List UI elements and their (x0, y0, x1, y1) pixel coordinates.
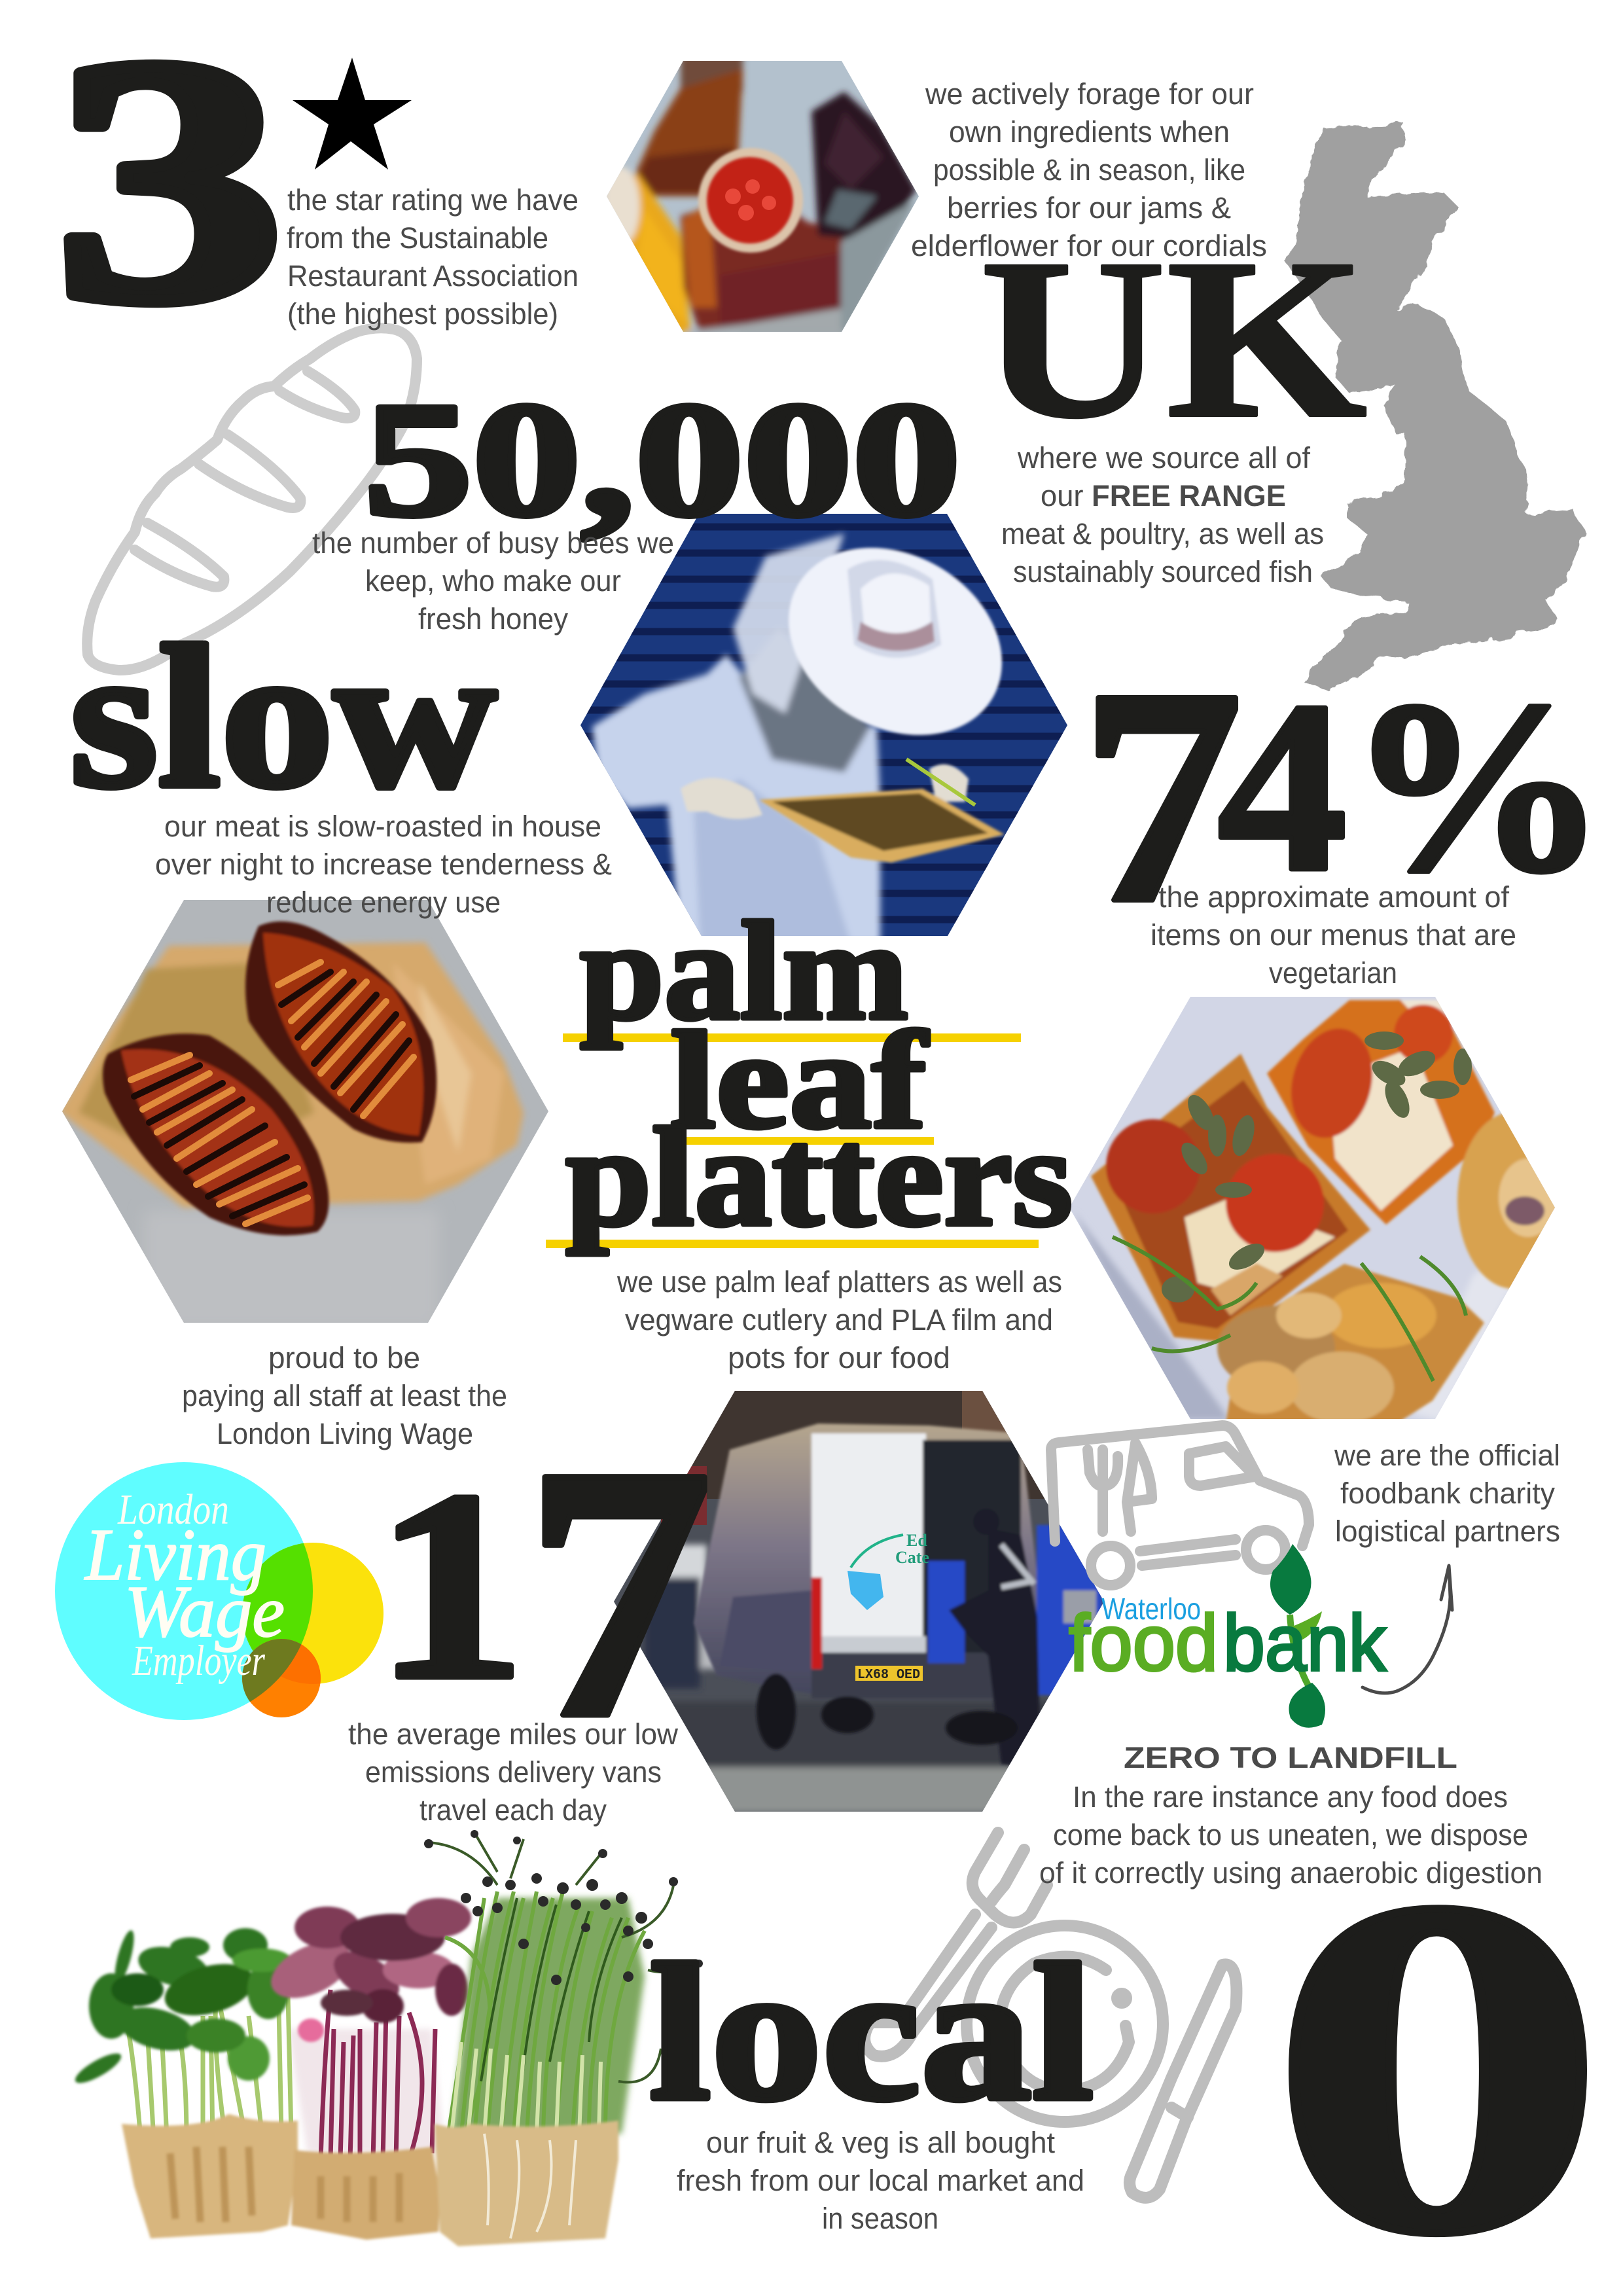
text: local produce: our fruit & veg is all bought (706, 2126, 1055, 2159)
photo hexagon: delivery van being loaded: Cate (895, 1548, 929, 1567)
icon: baguette outline (87, 328, 417, 670)
text: delivery miles: the average miles our low (348, 1717, 678, 1751)
text: foraging: own ingredients when (949, 115, 1230, 149)
text: vegetarian share: the approximate amount of (1158, 880, 1509, 914)
yellow rules behind palm leaf platters (546, 1033, 1039, 1248)
hand-drawn arrow (1363, 1566, 1452, 1693)
logo: Waterloo foodbank: food (1069, 1598, 1218, 1687)
logo: Waterloo foodbank: bank (1223, 1598, 1387, 1687)
big figure: 17: 7 (524, 1391, 713, 1794)
text: UK sourcing: where we source all of (1017, 441, 1310, 475)
text: foraging: berries for our jams & (947, 191, 1231, 224)
logo: London Living Wage Employer: Employer (132, 1637, 265, 1685)
text: palm leaf platters: vegware cutlery and PLA film and (625, 1303, 1053, 1336)
text: star rating: the star rating we have (287, 183, 579, 217)
photo hexagon: jars of jam (602, 56, 923, 334)
text: vegetarian share (1150, 880, 1516, 990)
photo hexagon: delivery van being loaded: Ed (906, 1531, 927, 1550)
photo hexagon: flatbreads with tomato, feta and pumpkin seeds (1067, 995, 1569, 1424)
big word: UK: UK (980, 211, 1368, 465)
text: zero to landfill: In the rare instance any food does (1073, 1780, 1508, 1814)
text: living wage (182, 1341, 507, 1450)
icon: map of Great Britain (1283, 123, 1585, 691)
text: delivery miles: emissions delivery vans (365, 1755, 662, 1789)
big words: palm leaf platters: platters (565, 1099, 1073, 1255)
logo: Waterloo foodbank (1069, 1544, 1387, 1728)
text: foraging (911, 77, 1267, 262)
text: bees: keep, who make our (365, 564, 621, 598)
text: local produce (677, 2126, 1084, 2235)
icon: star (293, 58, 412, 170)
big figure: 74%: 4% (1217, 651, 1607, 923)
icon: fork, plate and knife outline (865, 1833, 1236, 2198)
text: living wage: paying all staff at least the (182, 1379, 507, 1412)
text: foraging: we actively forage for our (925, 77, 1254, 111)
text: foodbank partners: logistical partners (1335, 1515, 1560, 1548)
text: slow roasting: over night to increase tenderness & (155, 848, 612, 881)
text: foraging: elderflower for our cordials (911, 229, 1267, 262)
big figure: 17: 1 (374, 1435, 526, 1736)
big words: palm leaf platters: palm (580, 893, 908, 1049)
big figure: 50,000: 50,000 (364, 369, 961, 550)
logo: London Living Wage Employer: Living (84, 1515, 266, 1596)
text: local produce: fresh from our local market and (677, 2164, 1084, 2197)
text: delivery miles (348, 1717, 678, 1827)
big figure: 17 (374, 1391, 713, 1794)
text: palm leaf platters (616, 1265, 1062, 1374)
text: zero to landfill: of it correctly using anaerobic digestion (1039, 1856, 1543, 1890)
text: foodbank partners: foodbank charity (1340, 1477, 1555, 1510)
text: slow roasting: our meat is slow-roasted in house (164, 810, 601, 843)
text: star rating: (the highest possible) (287, 297, 558, 331)
big words: palm leaf platters: leaf (670, 1003, 929, 1158)
big figure: 74%: 7 (1080, 625, 1243, 967)
text: foodbank partners (1334, 1439, 1560, 1548)
text: zero to landfill: ZERO TO LANDFILL (1124, 1741, 1457, 1774)
text: living wage: proud to be (268, 1341, 420, 1374)
logo: London Living Wage Employer: London (117, 1486, 229, 1534)
logo: London Living Wage Employer: Wage (124, 1571, 285, 1653)
text: star rating: from the Sustainable (287, 221, 548, 255)
photo hexagon: delivery van being loaded: LX68 OED (857, 1668, 920, 1683)
text: bees (312, 526, 674, 636)
text: bees: the number of busy bees we (312, 526, 674, 560)
text: vegetarian share: items on our menus that are (1150, 918, 1516, 952)
photo hexagon: delivery van being loaded (609, 1388, 1113, 1820)
photo: microgreens in three trays (71, 1830, 703, 2246)
text: palm leaf platters: we use palm leaf platters as well as (616, 1265, 1062, 1299)
big word: local: local (649, 1924, 1094, 2141)
logo: Waterloo foodbank: Waterloo (1101, 1592, 1201, 1626)
logo: London Living Wage Employer (55, 1462, 383, 1720)
text: foraging: possible & in season, like (933, 153, 1245, 187)
text: foodbank partners: we are the official (1334, 1439, 1560, 1472)
text: living wage: London Living Wage (217, 1417, 473, 1450)
big words: palm leaf platters (565, 893, 1073, 1255)
text: UK sourcing: meat & poultry, as well as (1001, 517, 1324, 550)
big figure: 74% (1080, 625, 1607, 967)
text: star rating: Restaurant Association (287, 259, 579, 293)
text: UK sourcing: our FREE RANGE (1041, 479, 1286, 512)
text: zero to landfill: come back to us uneaten, we dispose (1053, 1818, 1528, 1852)
text: UK sourcing (1001, 441, 1324, 588)
photo hexagon: roasted meat on baking paper (59, 897, 556, 1329)
text: palm leaf platters: pots for our food (728, 1341, 950, 1374)
text: delivery miles: travel each day (419, 1793, 607, 1827)
text: star rating (287, 183, 579, 331)
photo hexagon: beekeeper inspecting a frame (576, 511, 1073, 942)
icon: delivery van outline (1051, 1426, 1309, 1585)
text: bees: fresh honey (418, 602, 568, 636)
text: zero to landfill (1039, 1741, 1543, 1890)
text: local produce: in season (822, 2202, 938, 2235)
text: slow roasting: reduce energy use (266, 886, 501, 919)
text: UK sourcing: sustainably sourced fish (1013, 555, 1313, 588)
text: vegetarian share: vegetarian (1269, 956, 1397, 990)
big word: slow: slow (70, 604, 497, 830)
text: slow roasting (155, 810, 612, 919)
